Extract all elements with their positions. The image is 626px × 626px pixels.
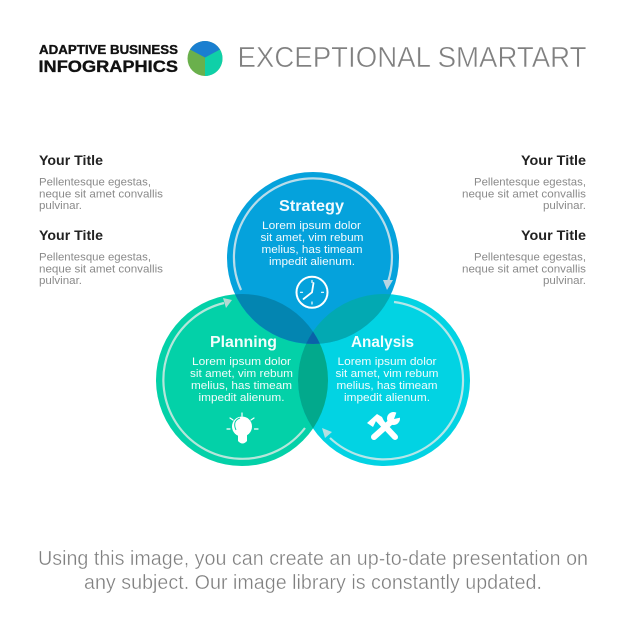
overlap: strategy and analysis xyxy=(306,294,391,344)
left text block 1: pulvinar. xyxy=(39,200,82,212)
right text block 1: pulvinar. xyxy=(543,200,586,212)
icon: tools xyxy=(367,411,403,437)
icon: clock xyxy=(296,277,328,308)
left text block 1: Your Title xyxy=(39,153,104,168)
planning text xyxy=(190,334,293,404)
left text block 2: pulvinar. xyxy=(39,275,82,287)
right text block 2: pulvinar. xyxy=(543,275,586,287)
left text block 2: Pellentesque egestas, xyxy=(39,252,151,264)
arrow: strategy ring xyxy=(234,178,393,290)
arrow: analysis ring xyxy=(322,302,463,459)
analysis text: impedit alienum. xyxy=(344,392,430,404)
left text block 2: Your Title xyxy=(39,228,104,243)
overlap: center xyxy=(306,332,320,344)
right text block 2: Your Title xyxy=(521,228,587,243)
analysis text: Lorem ipsum dolor xyxy=(338,356,437,368)
header logo text xyxy=(38,42,178,76)
strategy text: sit amet, vim rebum xyxy=(260,232,364,244)
left text block 1 xyxy=(39,153,164,212)
left text block 2: neque sit amet convallis xyxy=(39,264,164,276)
planning text: Planning xyxy=(210,334,277,351)
strategy text: melius, has timeam xyxy=(262,244,362,256)
strategy text: Lorem ipsum dolor xyxy=(262,220,361,232)
overlap: strategy and planning xyxy=(235,294,313,344)
strategy text: impedit alienum. xyxy=(269,256,355,268)
planning text: melius, has timeam xyxy=(191,380,292,392)
left text block 1: neque sit amet convallis xyxy=(39,188,164,200)
analysis text xyxy=(336,334,438,404)
right text block 1: Pellentesque egestas, xyxy=(474,176,586,188)
strategy text: Strategy xyxy=(279,198,344,215)
right text block 2: neque sit amet convallis xyxy=(462,264,587,276)
footer text: Using this image, you can create an up-to-date presentation on xyxy=(38,548,588,570)
planning text: Lorem ipsum dolor xyxy=(192,356,291,368)
left text block 2 xyxy=(39,228,164,287)
analysis text: sit amet, vim rebum xyxy=(336,368,438,380)
venn diagram xyxy=(156,172,470,466)
left text block 1: Pellentesque egestas, xyxy=(39,176,151,188)
right text block 1: neque sit amet convallis xyxy=(462,188,587,200)
circle: planning xyxy=(156,294,328,466)
planning text: sit amet, vim rebum xyxy=(190,368,293,380)
right text block 1 xyxy=(462,153,587,212)
analysis text: Analysis xyxy=(351,334,414,351)
title: EXCEPTIONAL SMARTART xyxy=(238,42,586,74)
analysis text: melius, has timeam xyxy=(336,380,438,392)
footer text xyxy=(38,548,588,594)
right text block 2 xyxy=(462,228,587,287)
header logo text: ADAPTIVE BUSINESS xyxy=(39,42,178,57)
overlap: planning and analysis xyxy=(298,344,328,428)
logo pie icon xyxy=(188,41,222,76)
footer text: any subject. Our image library is constantly updated. xyxy=(84,572,542,594)
arrow: planning ring xyxy=(163,298,305,459)
right text block 1: Your Title xyxy=(521,153,587,168)
circle: strategy xyxy=(227,172,399,344)
icon: light bulb xyxy=(227,413,258,444)
right text block 2: Pellentesque egestas, xyxy=(474,252,586,264)
header logo text: INFOGRAPHICS xyxy=(38,57,178,76)
strategy text xyxy=(260,198,364,268)
circle: analysis xyxy=(298,294,470,466)
planning text: impedit alienum. xyxy=(198,392,284,404)
